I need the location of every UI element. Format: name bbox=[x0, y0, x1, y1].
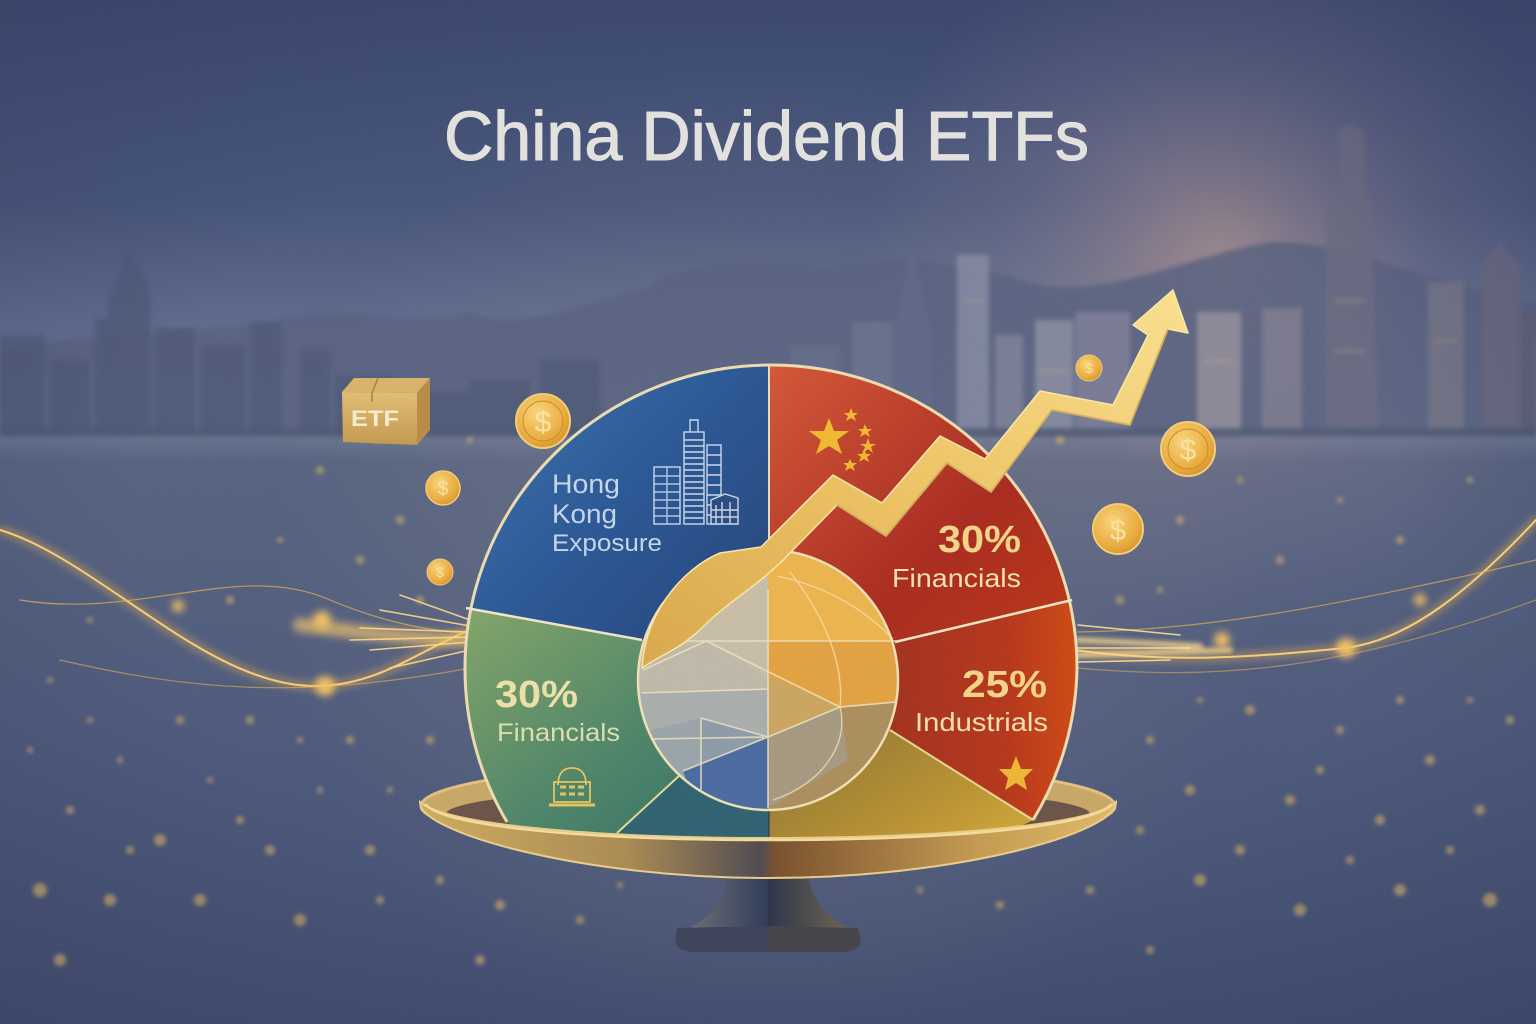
slice: blue Hong Kong bbox=[472, 366, 768, 640]
sphere right facets bbox=[768, 545, 903, 641]
label: Hong Kong Exposure: Kong bbox=[552, 499, 617, 529]
skyline: left buildings bbox=[0, 250, 600, 432]
icon: coin large right: $ bbox=[1180, 434, 1197, 467]
icon: coin tiny right: $ bbox=[1085, 360, 1093, 376]
slice: red lower bbox=[890, 602, 1076, 818]
icon: coin large right bbox=[1161, 422, 1215, 476]
slice: green financials bbox=[466, 610, 678, 834]
icon: coin tiny right bbox=[1076, 355, 1102, 381]
icon: ETF box bbox=[342, 378, 430, 445]
label: 25% Industrials bbox=[915, 664, 1048, 737]
slice: teal lower bbox=[618, 777, 769, 837]
horizon waterline bbox=[0, 428, 1536, 437]
label: 25% Industrials: 25% bbox=[962, 664, 1047, 706]
icon: ETF box: ETF bbox=[351, 406, 399, 431]
rising gold arrow bbox=[642, 290, 1188, 668]
label: 30% Financials left: 30% bbox=[495, 674, 578, 716]
skyline: distant mountains bbox=[0, 242, 1536, 432]
central sphere bbox=[636, 551, 900, 812]
slice: red upper bbox=[770, 366, 1068, 642]
label: Hong Kong Exposure: Exposure bbox=[552, 530, 662, 557]
golden bokeh sparkles bbox=[27, 436, 1514, 966]
icon: coin tiny left: $ bbox=[436, 564, 444, 580]
icon: coin small left: $ bbox=[438, 479, 449, 500]
icon: coin large left bbox=[516, 394, 570, 448]
pie dome bbox=[464, 364, 1078, 837]
label: 30% Financials upper right: Financials bbox=[892, 563, 1021, 593]
pedestal stem and base bbox=[675, 870, 861, 952]
icon: coin small left bbox=[426, 471, 460, 505]
label: 30% Financials left bbox=[495, 674, 620, 747]
slice: gold lower bbox=[769, 730, 1032, 837]
left golden light streams bbox=[0, 530, 470, 688]
skyline: right buildings bbox=[790, 124, 1536, 432]
label: 30% Financials left: Financials bbox=[497, 719, 620, 747]
right golden light streams bbox=[1075, 520, 1536, 673]
icon: bank building bbox=[549, 768, 595, 805]
label: Hong Kong Exposure: Hong bbox=[552, 469, 620, 499]
label: 25% Industrials: Industrials bbox=[915, 707, 1048, 737]
label: 30% Financials upper right bbox=[892, 519, 1021, 593]
label: Hong Kong Exposure bbox=[552, 469, 662, 557]
icon: coin large left: $ bbox=[535, 406, 552, 439]
icon: China flag stars bbox=[809, 408, 876, 471]
pan back rim bbox=[421, 762, 1115, 850]
icon: Hong Kong buildings bbox=[654, 420, 738, 524]
sphere left facets bbox=[640, 575, 768, 693]
pan front rim bbox=[420, 802, 1116, 878]
icon: coin medium right: $ bbox=[1110, 515, 1126, 547]
label: 30% Financials upper right: 30% bbox=[938, 519, 1021, 561]
icon: star bbox=[999, 756, 1033, 790]
icon: coin tiny left bbox=[427, 559, 453, 585]
icon: coin medium right bbox=[1093, 504, 1143, 554]
title: China Dividend ETFs bbox=[444, 97, 1089, 175]
